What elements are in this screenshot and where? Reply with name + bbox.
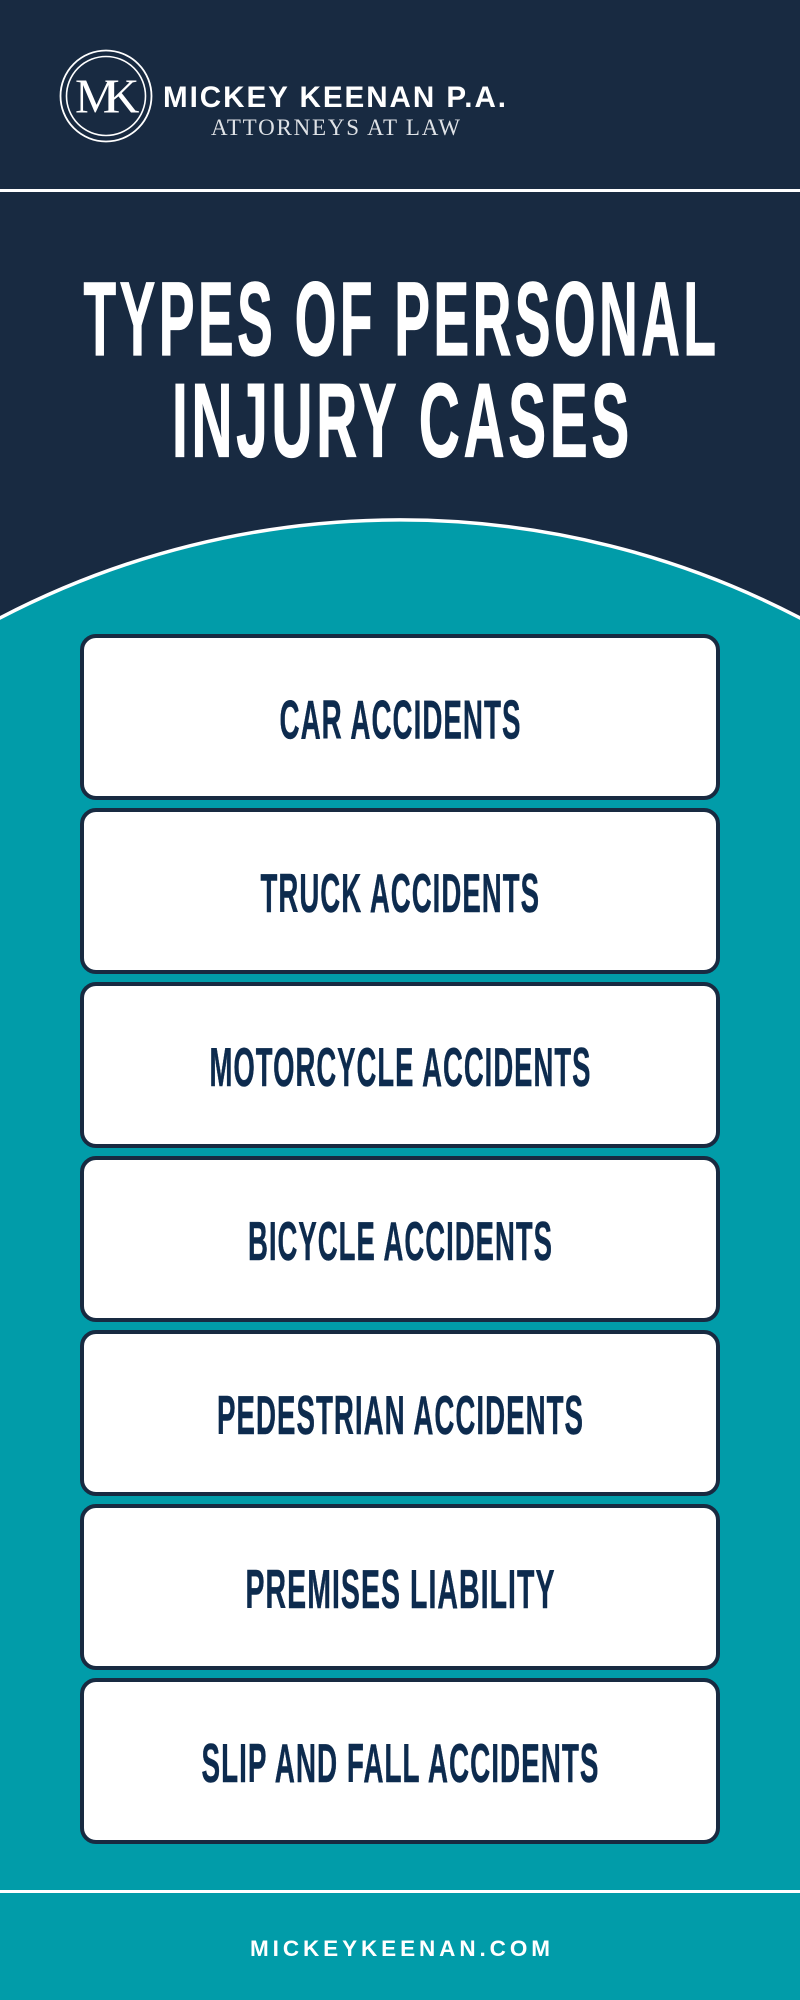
- logo: [60, 50, 508, 142]
- panel: truck accidents: TRUCK ACCIDENTS: [260, 863, 540, 924]
- panel: car accidents: CAR ACCIDENTS: [280, 690, 522, 750]
- panel: car accidents: [82, 636, 718, 798]
- panel: slip and fall accidents: [82, 1680, 718, 1842]
- panel: motorcycle accidents: [82, 984, 718, 1146]
- header background: [0, 0, 800, 640]
- panel: bicycle accidents: [82, 1158, 718, 1320]
- panel: truck accidents: [82, 810, 718, 972]
- title: [84, 261, 720, 480]
- firm name: MICKEY KEENAN P.A.: [163, 81, 508, 114]
- panel: pedestrian accidents: [82, 1332, 718, 1494]
- firm tagline: ATTORNEYS AT LAW: [211, 115, 460, 140]
- teal arc section: [0, 520, 800, 2000]
- arc outline: [0, 520, 800, 619]
- icon: MK monogram: [60, 50, 152, 142]
- panel: premises liability: [82, 1506, 718, 1668]
- footer website: MICKEYKEENAN.COM: [250, 1936, 550, 1961]
- icon: MK monogram: MK: [75, 68, 139, 124]
